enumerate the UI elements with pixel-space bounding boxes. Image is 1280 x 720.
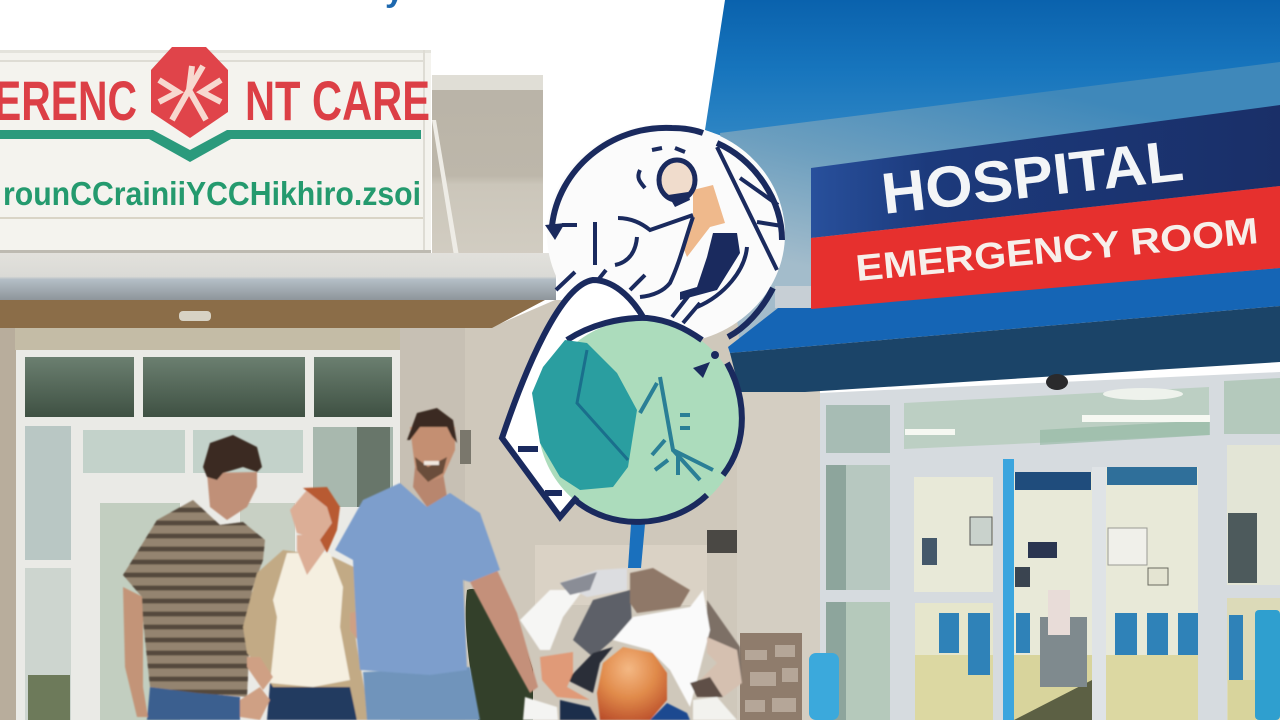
panel: family of three xyxy=(120,408,538,720)
shrub xyxy=(466,589,533,720)
floors xyxy=(915,655,993,720)
woman xyxy=(240,487,382,720)
blue door edge xyxy=(1003,459,1014,720)
panel: central medical illustrations xyxy=(502,124,785,720)
dark soffit xyxy=(730,306,1280,392)
man right xyxy=(335,408,538,720)
urgent care sign xyxy=(0,47,431,253)
wall stone tower xyxy=(432,75,543,258)
soffit xyxy=(0,300,545,328)
icon: red cross badge xyxy=(151,47,228,138)
lower window panes xyxy=(25,426,71,560)
hospital sign: HOSPITAL xyxy=(878,128,1187,227)
ceiling fixture xyxy=(179,311,211,321)
security camera xyxy=(1046,374,1068,390)
panel: urgent care building xyxy=(0,47,820,720)
illustration: patient with glowing injury xyxy=(520,568,742,720)
connector stem xyxy=(628,524,645,568)
interior details xyxy=(1015,472,1091,490)
hospital sign: EMERGENCY ROOM xyxy=(854,210,1260,289)
illustration: lung xyxy=(502,280,742,524)
left window frame xyxy=(16,350,400,720)
green underline chevron xyxy=(0,130,421,162)
building wall xyxy=(0,300,820,720)
blue canopy band xyxy=(728,268,1280,353)
fascia xyxy=(720,62,1280,350)
canopy xyxy=(0,253,556,300)
urgent care sign: NT CARE xyxy=(245,69,430,132)
man left xyxy=(120,435,270,720)
hospital sign xyxy=(811,105,1280,309)
ceiling lights xyxy=(1082,415,1210,422)
door frame divider xyxy=(1092,467,1106,720)
panel: hospital building xyxy=(705,0,1280,720)
blue bollards xyxy=(809,653,839,720)
illustration: injured patient xyxy=(545,124,785,344)
entrance frame xyxy=(820,372,1280,720)
grey strip beside sign xyxy=(775,286,811,308)
blue roof xyxy=(705,0,1280,168)
side panes xyxy=(826,465,890,590)
upper window panes xyxy=(25,357,134,417)
upper glass panes xyxy=(826,405,890,453)
wall shading xyxy=(0,328,16,720)
door panes xyxy=(914,477,993,592)
sign subtext: rounCCrainiiYCCHikhiro.zsoi xyxy=(3,175,421,212)
stone base xyxy=(740,633,802,720)
